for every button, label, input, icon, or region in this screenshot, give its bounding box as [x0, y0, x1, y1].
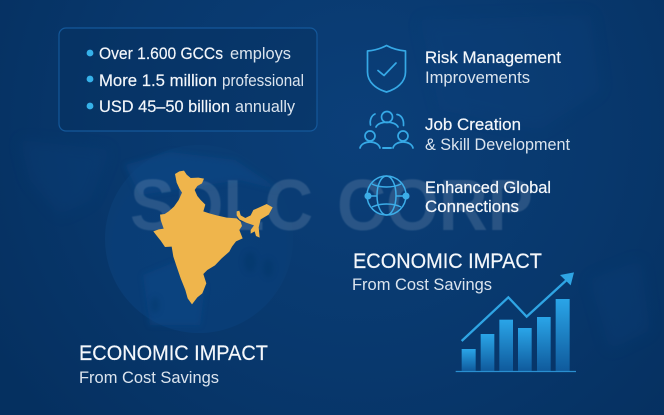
watermark: CORP	[337, 166, 533, 246]
text: global connections	[425, 179, 551, 216]
bullet: professionals	[87, 72, 304, 90]
heading: economic impact left: ECONOMIC IMPACT	[79, 342, 268, 365]
text: risk management: Improvements	[425, 69, 530, 87]
panel: key statistics	[59, 28, 317, 131]
axis	[456, 369, 576, 373]
heading: economic impact right	[352, 250, 542, 294]
trend arrow	[462, 272, 574, 341]
bullet: annual value: annually	[235, 98, 296, 116]
bullet: GCCs: employs	[230, 45, 291, 63]
bullet: professionals: professional	[222, 72, 304, 90]
heading: economic impact right: From Cost Savings	[352, 276, 492, 294]
watermark: SDLC	[130, 166, 313, 246]
text: risk management	[425, 49, 561, 87]
watermark	[130, 166, 533, 246]
icon: people	[360, 112, 413, 148]
bar chart with trend arrow	[456, 272, 576, 371]
text: global connections: Enhanced Global	[425, 179, 551, 197]
bullet: professionals: More 1.5 million	[99, 72, 217, 90]
icon: globe with connections	[365, 176, 409, 215]
globe behind map	[105, 145, 293, 333]
map of India	[153, 171, 273, 304]
text: global connections: Connections	[425, 198, 519, 216]
text: risk management: Risk Management	[425, 49, 561, 67]
heading: economic impact left	[79, 342, 268, 387]
bullet: annual value: USD 45–50 billion	[99, 98, 230, 116]
bars	[462, 299, 570, 371]
heading: economic impact right: ECONOMIC IMPACT	[353, 250, 542, 273]
text: job creation: & Skill Development	[425, 136, 570, 154]
text: job creation: Job Creation	[425, 116, 521, 134]
text: job creation	[425, 116, 570, 154]
bullet: GCCs: Over 1.600 GCCs	[99, 45, 223, 63]
heading: economic impact left: From Cost Savings	[79, 369, 219, 387]
bullet: GCCs	[87, 45, 291, 63]
icon: shield	[368, 46, 406, 92]
bullet: annual value	[87, 98, 296, 116]
